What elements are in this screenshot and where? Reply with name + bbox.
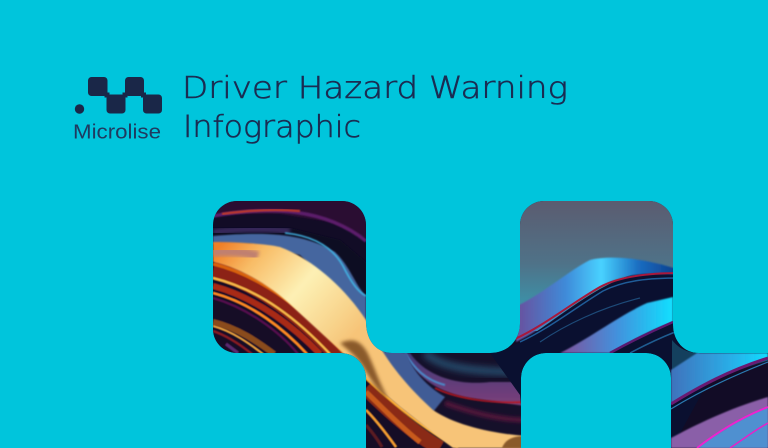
ribbon lower shadow patch xyxy=(502,436,521,448)
middle section: blue-grey shoulder xyxy=(366,322,445,412)
ribbon shadow patch xyxy=(340,340,388,398)
middle section: dark and purple ripple xyxy=(404,353,525,425)
bottom right: blue ribbons xyxy=(671,353,768,448)
amber edge on gold ribbon xyxy=(213,252,258,256)
right square: dark wave body xyxy=(490,273,706,437)
highlight line on blue band xyxy=(285,233,366,296)
dark navy shadow under wave xyxy=(540,298,640,342)
title xyxy=(182,71,568,145)
left square and centre: lower stripes xyxy=(213,262,460,448)
centre stripes xyxy=(366,388,440,448)
logo mark xyxy=(75,77,162,114)
golden ribbon xyxy=(213,242,525,448)
red line on wave xyxy=(515,273,680,339)
title line 1: Driver Hazard Warning xyxy=(182,71,568,106)
second blue band xyxy=(560,297,673,353)
right square: gradient sky xyxy=(515,196,680,331)
teal line under wave xyxy=(520,278,680,342)
abstract swirl artwork panel xyxy=(213,196,768,448)
left square: blue band xyxy=(213,233,366,322)
logo wordmark: Microlise xyxy=(73,120,161,144)
left square: dark upper ripples xyxy=(213,201,366,260)
logo: Microlise xyxy=(73,77,162,144)
right square: blue wave xyxy=(516,258,680,342)
title line 2: Infographic xyxy=(183,110,361,145)
